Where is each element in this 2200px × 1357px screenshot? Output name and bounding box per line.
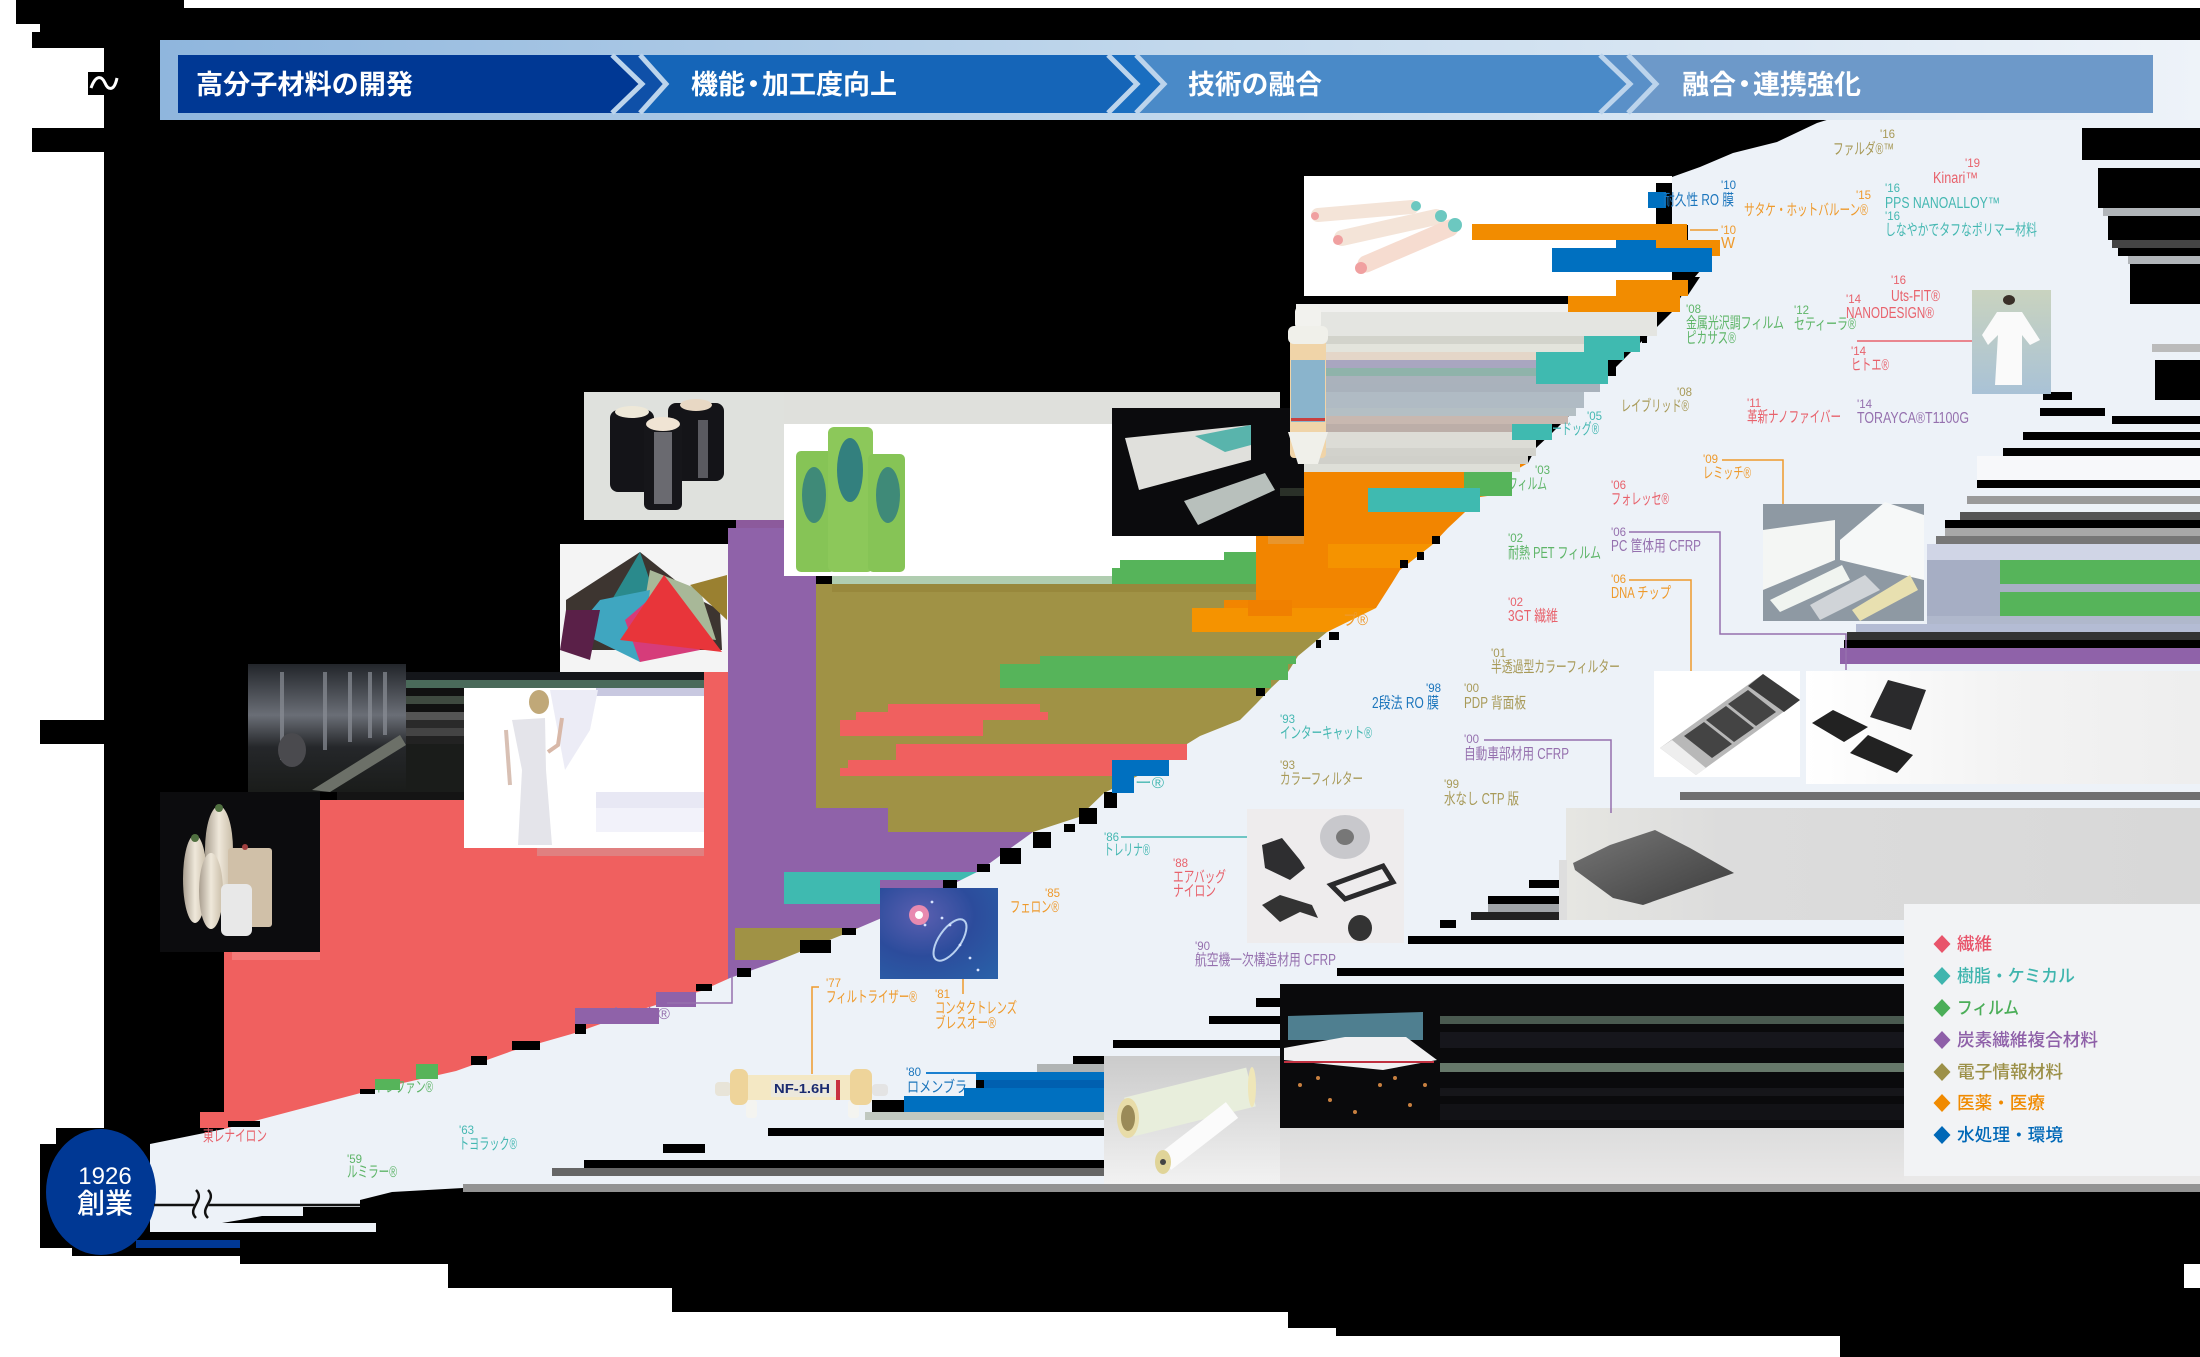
product label: '01 transflective colour filter — [1491, 648, 1620, 676]
product label: '90 aircraft CFRP — [1195, 941, 1336, 969]
product label: '00 PDP: PDP 背面板 — [1464, 694, 1526, 712]
connector lines — [667, 230, 1972, 1074]
product label: '12 Cetilar: セティーラ® — [1794, 316, 1856, 333]
heading: stage 2: 機能・加工度向上 — [691, 70, 897, 100]
product label: '06 PC CFRP: PC 筐体用 CFRP — [1611, 537, 1701, 555]
legend: film — [1934, 998, 2019, 1018]
product label: '16 PPS Nanoalloy: '16 — [1885, 183, 1900, 195]
product label: '63 Toyolac — [459, 1125, 517, 1153]
product label: '08 Raybrid: '08 — [1677, 387, 1692, 399]
labels partially hidden by bars: ードッグ® — [1552, 420, 1599, 438]
category bars — [200, 192, 2200, 1128]
labels partially hidden by bars: プ® — [1343, 611, 1369, 629]
product label: '11 nanofiber — [1747, 398, 1841, 426]
photo: moulded resin parts — [1247, 809, 1404, 943]
legend: water and environment: 水処理・環境 — [1957, 1125, 2064, 1145]
heading: stage 3: 技術の融合 — [1188, 70, 1322, 100]
product label: '19 Kinari: Kinari™ — [1933, 170, 1978, 187]
product label: '93 colour filter: '93 — [1280, 760, 1295, 772]
product label: '16 PPS Nanoalloy — [1885, 183, 2000, 212]
product label: '06 DNA chip: '06 — [1611, 574, 1626, 586]
product label: '06 DNA chip — [1611, 574, 1671, 602]
legend: resin and chemicals: 樹脂・ケミカル — [1957, 966, 2075, 986]
legend: film: フィルム — [1957, 998, 2019, 1018]
product label: '99 waterless CTP — [1444, 779, 1519, 808]
product label: '77 Filtryzer: フィルトライザー® — [826, 988, 917, 1006]
heading: stage 1: 高分子材料の開発 — [196, 70, 413, 100]
labels partially hidden by bars — [203, 420, 1599, 1145]
labels partially hidden by bars: フィルム — [1508, 476, 1547, 493]
product label: '02 3GT: 3GT 繊維 — [1508, 607, 1558, 625]
top white strip — [184, 0, 2200, 8]
product label: '77 Filtryzer — [826, 978, 917, 1006]
product label: '81 contact lens — [935, 989, 1017, 1032]
product label: '00 auto CFRP — [1464, 734, 1569, 763]
product label: '02 heat-resistant PET — [1508, 533, 1601, 562]
product label: '99 waterless CTP: 水なし CTP 版 — [1444, 790, 1519, 808]
product label: '16 Falda: ファルダ®™ — [1833, 140, 1894, 158]
photo: contact lens — [880, 888, 998, 979]
photo: artificial kidney device: NF-1.6H — [774, 1081, 830, 1096]
product label: '86 Torelina: トレリナ® — [1104, 842, 1150, 859]
product label: '08 metallic film: '08 — [1686, 304, 1701, 316]
photo: coloured fabric — [560, 544, 728, 672]
photo: woman in white dress — [464, 688, 704, 856]
product label: '06 Foresse — [1611, 480, 1669, 508]
panel: pale curved timeline band — [150, 118, 2200, 1223]
labels partially hidden by bars: 東レナイロン — [203, 1127, 267, 1145]
legend: fibres: 繊維 — [1957, 934, 1992, 954]
photo: medical tubes — [1311, 201, 1462, 274]
product label: '93 Intercat: インターキャット® — [1280, 724, 1372, 742]
product label: '00 auto CFRP: '00 — [1464, 734, 1479, 746]
product label: '86 Torelina: '86 — [1104, 832, 1119, 844]
product label: '02 3GT: '02 — [1508, 597, 1523, 609]
product label: '80: '80 — [906, 1067, 921, 1079]
photo: water filter cartridge — [1288, 306, 1328, 464]
arrow: timeline break — [154, 1190, 360, 1218]
legend: pharma and medical: 医薬・医療 — [1957, 1093, 2046, 1113]
product label: '10 orange — [1721, 225, 1736, 252]
product label: '01 transflective colour filter: 半透過型カラーフィルター — [1491, 658, 1620, 676]
photo: hood band — [1559, 808, 2200, 920]
photo: artificial kidney device — [715, 1069, 888, 1118]
product label: '10 durable RO — [1663, 180, 1736, 209]
jagged black fragments along the curve — [228, 183, 1700, 1127]
header band — [160, 40, 2200, 120]
product label: '02 heat-resistant PET: '02 — [1508, 533, 1523, 545]
product label: '11 nanofiber: 革新ナノファイバー — [1747, 408, 1841, 426]
product label: '16 Uts-FIT: Uts-FIT® — [1891, 288, 1940, 305]
product label: '09 Remitch: '09 — [1703, 454, 1718, 466]
product label: '85 Feron: '85 — [1045, 888, 1060, 900]
product label: '14 Torayca: '14 — [1857, 399, 1873, 411]
heading: stage 4: 融合・連携強化 — [1682, 70, 1861, 100]
product label: '15 Satake balloon — [1744, 190, 1871, 219]
product label: '63 Toyolac: トヨラック® — [459, 1135, 517, 1153]
product label: '14 Hitoe — [1851, 346, 1889, 374]
product label: '98 two-stage RO — [1372, 683, 1441, 712]
photo: bobbins — [160, 792, 320, 952]
product label: '19 Kinari — [1933, 158, 1980, 187]
product label: '06 Foresse: '06 — [1611, 480, 1626, 492]
product label: '06 Foresse: フォレッセ® — [1611, 491, 1669, 508]
product label: '14 Nanodesign: NANODESIGN® — [1846, 305, 1934, 322]
product label: '59 Lumirror: '59 — [347, 1154, 362, 1166]
product label: '06 DNA chip: DNA チップ — [1611, 584, 1671, 602]
product label: '08 Raybrid: レイブリッド® — [1621, 396, 1689, 415]
product label: '88 airbag nylon — [1173, 858, 1226, 900]
product label: '02 heat-resistant PET: 耐熱 PET フィルム — [1508, 544, 1601, 562]
product label: '90 aircraft CFRP: '90 — [1195, 941, 1210, 953]
product label: '81 contact lens: '81 — [935, 989, 950, 1001]
product label: '85 Feron: フェロン® — [1010, 899, 1059, 916]
product label: '93 Intercat: '93 — [1280, 714, 1295, 726]
notch — [2184, 1264, 2200, 1288]
product label: '00 auto CFRP: 自動車部材用 CFRP — [1464, 745, 1569, 763]
labels partially hidden by bars: ロメンブラ — [907, 1077, 967, 1096]
labels partially hidden by bars: ー® — [1135, 775, 1165, 792]
product label: '88 airbag nylon: エアバッグ — [1173, 868, 1226, 886]
product label: '10 durable RO: 耐久性 RO 膜 — [1663, 191, 1734, 209]
product label: '16 flexible polymer: しなやかでタフなポリマー材料 — [1885, 221, 2037, 239]
product label: '09 Remitch — [1703, 454, 1751, 482]
circle: founding year — [46, 1129, 156, 1255]
product label: '11 nanofiber: '11 — [1747, 398, 1761, 410]
icon: tilde mark — [88, 72, 119, 95]
product label: '08 metallic film: ピカサス® — [1686, 330, 1736, 347]
product label: '19 Kinari: '19 — [1965, 158, 1980, 170]
product label: '88 airbag nylon: ナイロン — [1173, 883, 1216, 900]
product label: '00 PDP: '00 — [1464, 683, 1479, 695]
product label: '08 metallic film: 金属光沢調フィルム — [1686, 314, 1784, 332]
product label: '00 PDP — [1464, 683, 1526, 712]
product label: '12 Cetilar: '12 — [1794, 305, 1809, 317]
photo: green rolls — [796, 427, 905, 572]
coloured category blocks behind the curve — [224, 464, 1556, 1142]
photo: T-shirt on mannequin — [1972, 290, 2051, 394]
product label: '14 Nanodesign: '14 — [1846, 294, 1862, 306]
product label: '01 transflective colour filter: '01 — [1491, 648, 1506, 660]
product label: '93 colour filter: カラーフィルター — [1280, 770, 1363, 788]
circle: founding year: 1926 — [78, 1163, 132, 1190]
product label: '85 Feron — [1010, 888, 1060, 916]
product label: '16 flexible polymer — [1885, 211, 2037, 239]
labels partially hidden by bars: トレカ® — [610, 1006, 671, 1023]
product label: '81 contact lens: ブレスオー® — [935, 1013, 996, 1032]
product label: '90 aircraft CFRP: 航空機一次構造材用 CFRP — [1195, 951, 1336, 969]
legend panel — [1904, 904, 2200, 1176]
photo: carbon fibre car hood — [1573, 830, 1734, 905]
product label: '93 Intercat — [1280, 714, 1372, 742]
product label: '08 metallic film — [1686, 304, 1784, 347]
product label: '16 flexible polymer: '16 — [1885, 211, 1900, 223]
product label: '14 Hitoe: ヒトエ® — [1851, 357, 1889, 374]
photo: laptop parts — [1806, 671, 2200, 784]
product label: '86 Torelina — [1104, 832, 1150, 859]
product label: '15 Satake balloon: サタケ・ホットバルーン® — [1744, 201, 1868, 219]
photo: spools of fibre — [584, 392, 784, 520]
product label: '08 Raybrid — [1621, 387, 1692, 415]
photo: airliner row — [1280, 984, 1904, 1128]
circle: founding year: 創業 — [77, 1188, 133, 1219]
product label: '98 two-stage RO: '98 — [1426, 683, 1441, 695]
product label: '12 Cetilar — [1794, 305, 1856, 333]
product label: '16 PPS Nanoalloy: PPS NANOALLOY™ — [1885, 195, 2000, 212]
photo: DNA chip — [1654, 671, 1800, 777]
product label: '02 3GT — [1508, 597, 1558, 625]
product label: '16 Falda — [1833, 129, 1895, 158]
product label: '93 colour filter — [1280, 760, 1363, 788]
legend: carbon fibre composites: 炭素繊維複合材料 — [1957, 1030, 2098, 1050]
product label: '09 Remitch: レミッチ® — [1703, 465, 1751, 482]
legend: electronic materials: 電子情報材料 — [1957, 1062, 2063, 1082]
filter stripes to the left of the teal bars — [584, 304, 1657, 472]
legend: fibres — [1934, 934, 1992, 954]
product label: '06 PC CFRP: '06 — [1611, 527, 1626, 539]
product label: '59 Lumirror: ルミラー® — [347, 1164, 397, 1181]
photo: factory — [248, 664, 704, 800]
timeline base strip — [136, 1240, 240, 1248]
product label: '59 Lumirror — [347, 1154, 397, 1181]
product label: '63 Toyolac: '63 — [459, 1125, 474, 1137]
product label: '10 orange: '10 — [1721, 225, 1736, 237]
product label: '14 Nanodesign — [1846, 294, 1934, 322]
product label: '05: '05 — [1587, 411, 1602, 423]
product label: '06 PC CFRP — [1611, 527, 1701, 555]
product label: '14 Torayca: TORAYCA®T1100G — [1857, 410, 1969, 427]
white panels behind photos — [784, 176, 1672, 592]
photo: pharmaceutical boxes — [1763, 502, 1924, 621]
product label: '16 Falda: '16 — [1880, 129, 1895, 141]
right-side horizontal strips — [463, 128, 2200, 1192]
product label: '10 durable RO: '10 — [1721, 180, 1736, 192]
product label: '16 Uts-FIT: '16 — [1891, 275, 1906, 287]
labels partially hidden by bars: トレファン® — [375, 1079, 433, 1096]
product label: '77 Filtryzer: '77 — [826, 978, 841, 990]
product label: '88 airbag nylon: '88 — [1173, 858, 1188, 870]
product label: '15 Satake balloon: '15 — [1856, 190, 1871, 202]
photo: RO membrane elements row — [1104, 1056, 2200, 1184]
pale band lower lip — [150, 1223, 376, 1232]
product label: '03: '03 — [1535, 465, 1550, 477]
product label: '99 waterless CTP: '99 — [1444, 779, 1459, 791]
product label: '98 two-stage RO: 2段法 RO 膜 — [1372, 694, 1439, 712]
product label: '14 Hitoe: '14 — [1851, 346, 1867, 358]
photo: boxed medicine — [1112, 408, 1304, 536]
product label: '10 orange: W — [1721, 235, 1735, 252]
product label: '16 Uts-FIT — [1891, 275, 1940, 305]
product label: '14 Torayca — [1857, 399, 1969, 427]
product label: '81 contact lens: コンタクトレンズ — [935, 999, 1017, 1017]
